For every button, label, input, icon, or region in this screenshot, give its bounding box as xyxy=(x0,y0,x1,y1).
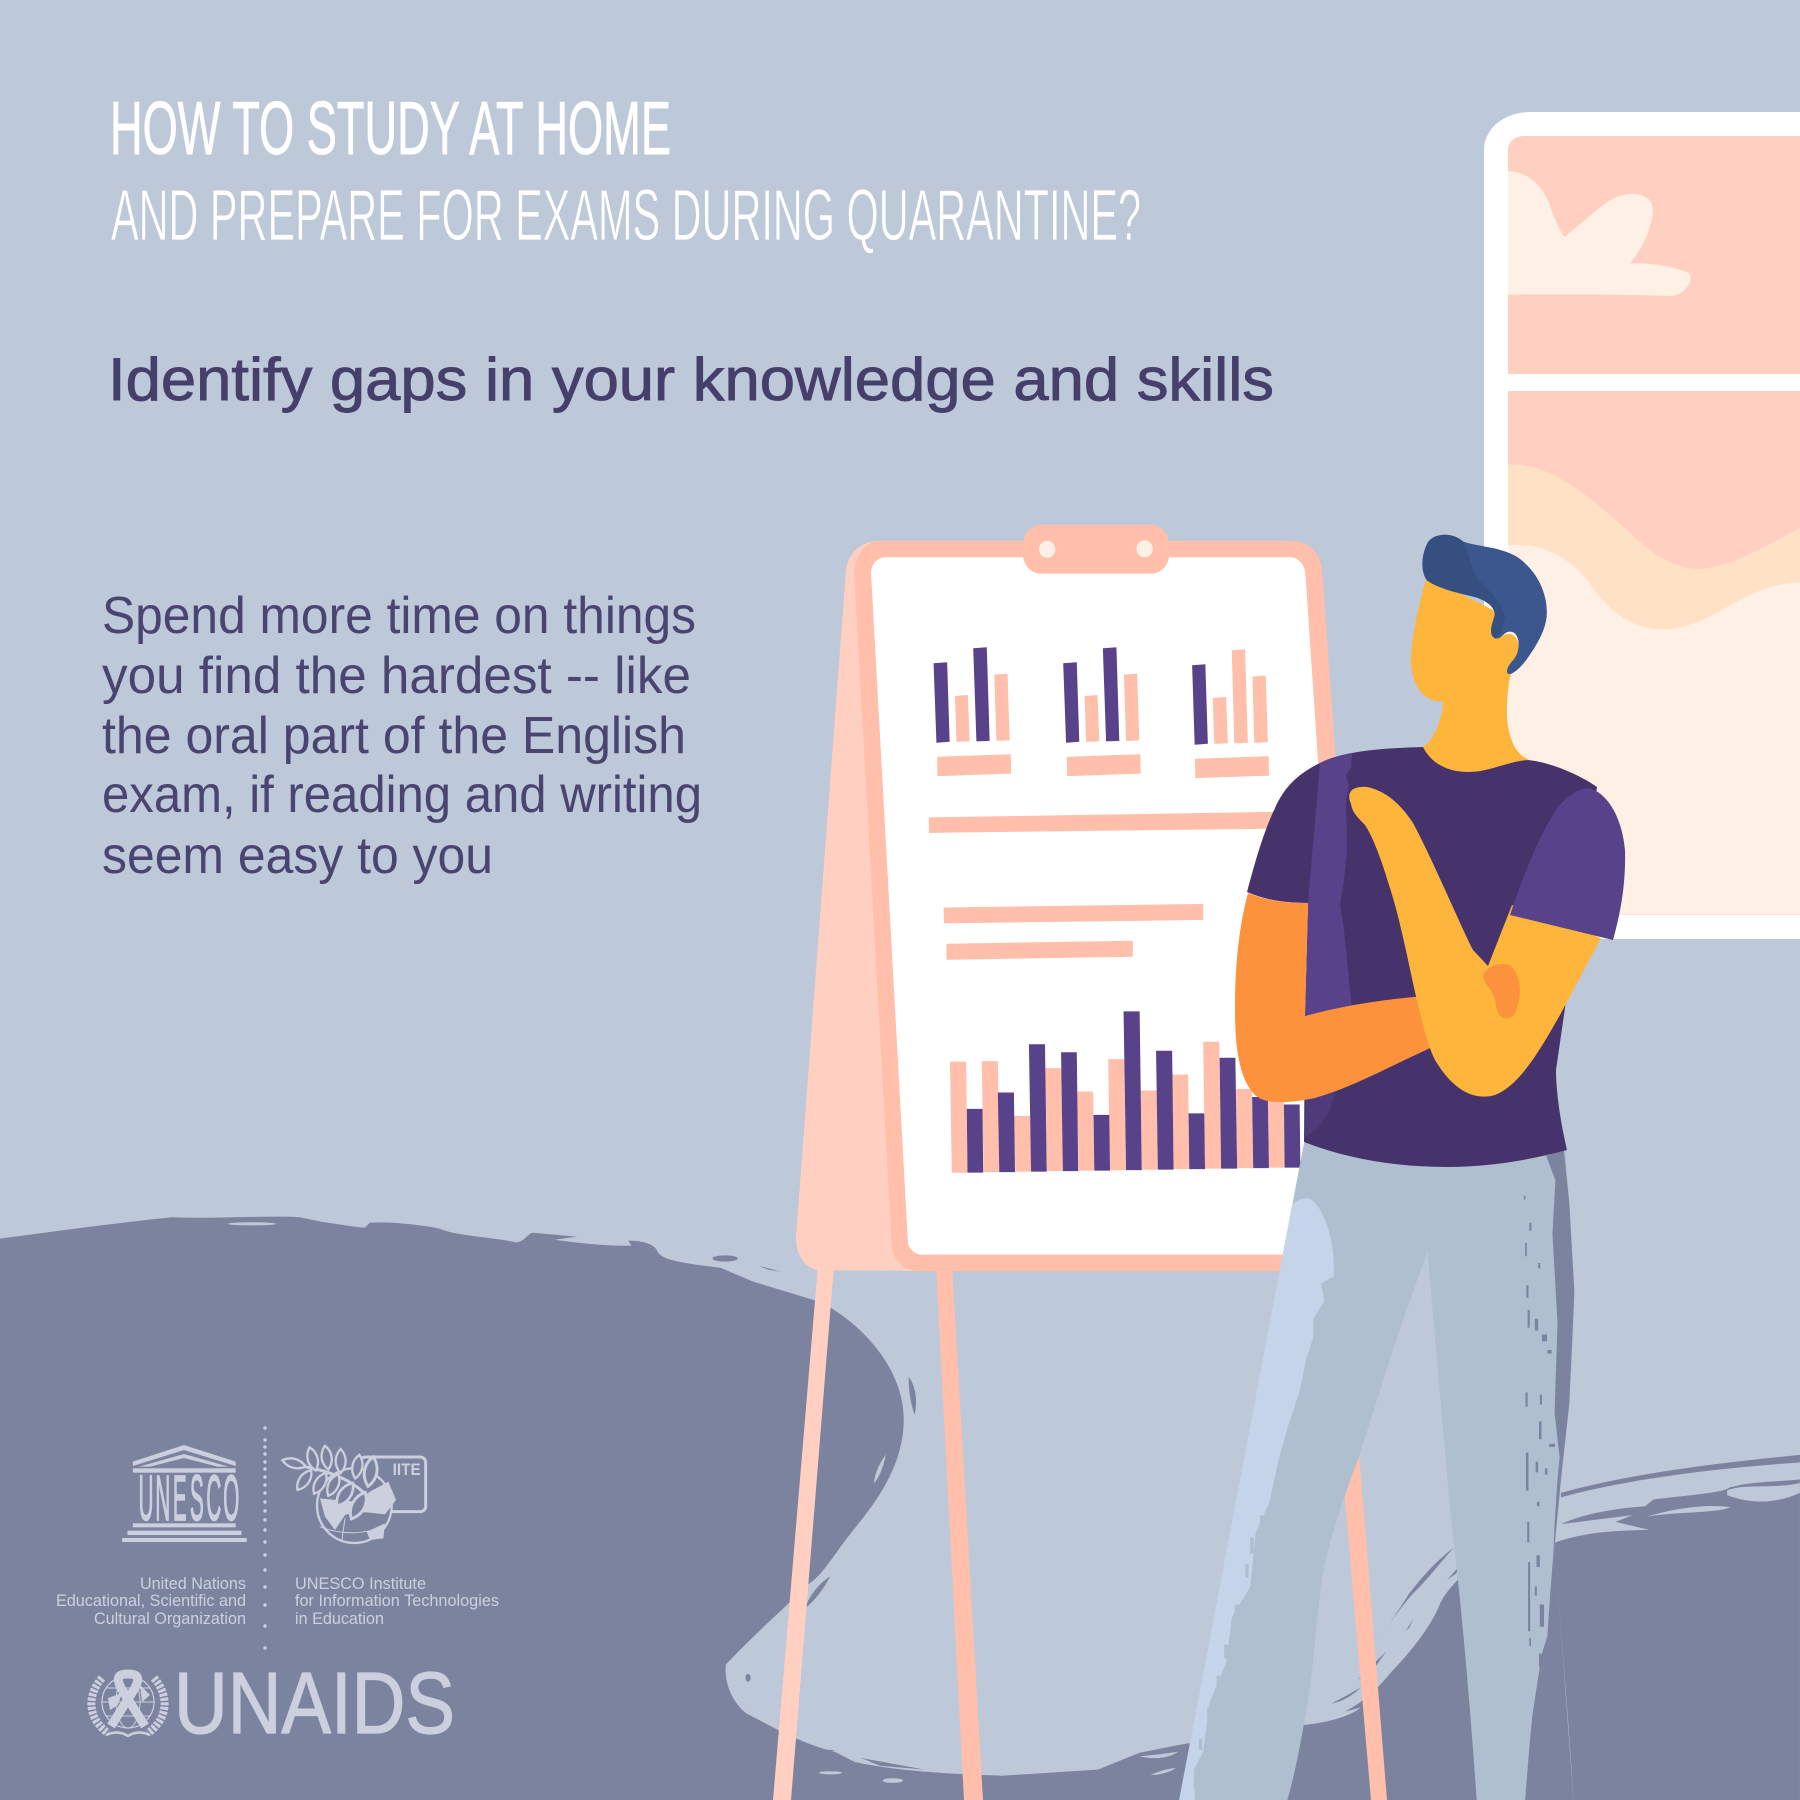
board clip xyxy=(1023,525,1169,574)
trousers xyxy=(1179,1142,1574,1800)
large bar chart xyxy=(950,1011,1300,1173)
IITE caption: for Information Technologies xyxy=(295,1592,499,1610)
sleeve xyxy=(1510,788,1625,940)
IITE caption: in Education xyxy=(295,1610,384,1628)
UNESCO caption: United Nations xyxy=(140,1575,246,1593)
t-shirt highlight xyxy=(1305,753,1352,1016)
board paper xyxy=(871,557,1351,1255)
trouser highlight strip xyxy=(1179,1198,1334,1800)
sand band xyxy=(1508,465,1800,915)
body text: Spend more time on things xyxy=(102,587,696,645)
neck and face xyxy=(1411,535,1547,787)
logo: UNAIDS emblem xyxy=(91,1674,165,1736)
logo: UNESCO temple xyxy=(122,1445,247,1542)
UNESCO caption: Cultural Organization xyxy=(94,1610,246,1628)
body text: exam, if reading and writing xyxy=(102,766,702,824)
t-shirt lower highlight xyxy=(1304,1092,1335,1138)
easel legs xyxy=(773,1265,1387,1800)
logo: IITE globe and branch: IITE xyxy=(393,1460,421,1479)
board back flap xyxy=(796,541,941,1271)
UNESCO caption xyxy=(56,1575,246,1628)
background brush shape: right ground xyxy=(1000,1455,1800,1800)
icon: cloud xyxy=(1508,171,1691,296)
body text: the oral part of the English xyxy=(102,707,686,765)
hand xyxy=(1483,964,1520,1018)
IITE caption xyxy=(295,1575,499,1628)
hair xyxy=(1422,535,1547,674)
logo: UNESCO temple: UNESCO xyxy=(139,1463,239,1535)
flip chart board xyxy=(796,525,1373,1271)
t-shirt xyxy=(1247,747,1597,1167)
arm: yellow arm xyxy=(1349,787,1601,1097)
title: HOW TO STUDY AT HOME xyxy=(110,86,671,170)
board frame xyxy=(854,541,1373,1271)
character: standing student xyxy=(1179,535,1625,1800)
logo: UNAIDS wordmark: UNAIDS xyxy=(174,1655,455,1752)
body text: seem easy to you xyxy=(102,827,493,885)
small bar chart 3 xyxy=(1192,649,1269,778)
background brush shape: left ground xyxy=(0,1217,1000,1800)
small bar chart 1 xyxy=(934,647,1011,776)
dotted divider xyxy=(263,1426,267,1650)
trouser shadow strip xyxy=(1525,1150,1574,1800)
cream hills xyxy=(1508,545,1800,915)
IITE caption: UNESCO Institute xyxy=(295,1575,426,1593)
heading: Identify gaps in your knowledge and skills xyxy=(108,346,1274,413)
panel: window with landscape xyxy=(1484,112,1800,939)
body text: you find the hardest -- like xyxy=(102,647,691,705)
body text xyxy=(102,587,702,885)
title xyxy=(110,86,1141,256)
small bar chart 2 xyxy=(1063,647,1141,776)
board text lines xyxy=(929,811,1298,960)
UNESCO caption: Educational, Scientific and xyxy=(56,1592,246,1610)
logo: IITE globe and branch xyxy=(281,1445,426,1543)
arm: orange forearm xyxy=(1235,893,1460,1102)
